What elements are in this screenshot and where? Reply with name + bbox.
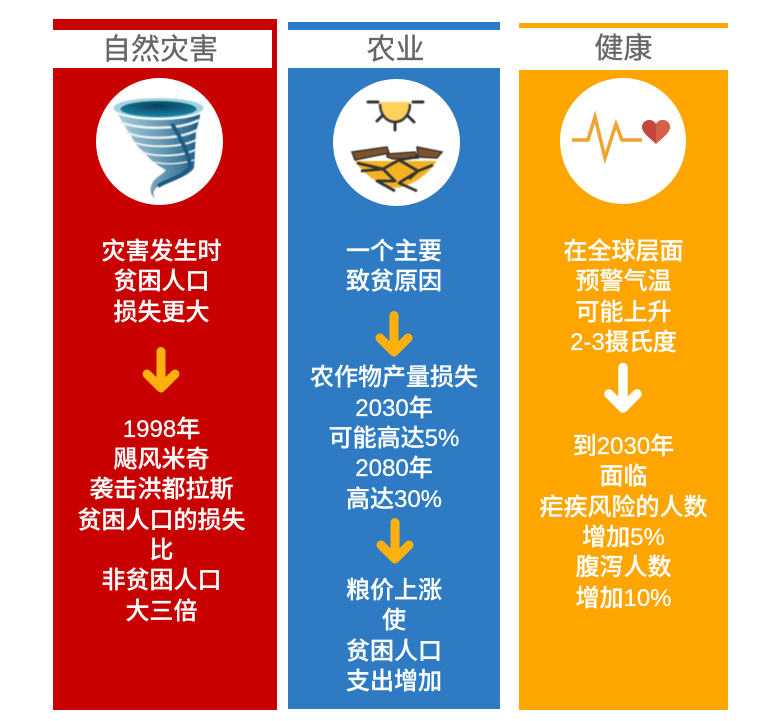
text: rising food prices: 粮价上涨 [346,577,442,604]
text: crop yield loss: 可能高达5% [329,425,459,452]
icon: tornado [96,78,222,205]
text: crop yield loss: 农作物产量损失 [310,364,478,391]
text: Hurricane Mitch: 飓风米奇 [114,446,210,473]
text: global warming: 在全球层面 [564,238,684,265]
text: Hurricane Mitch [78,416,246,625]
text: malaria and diarrhoea: 增加10% [575,585,672,612]
text: global warming [564,238,684,356]
text: main cause of poverty [346,238,442,295]
text: disaster intro: 灾害发生时 [102,238,222,265]
arrow: down [376,518,414,564]
blue column background [288,68,500,709]
text: disaster intro: 贫困人口 [114,268,210,295]
blue top bar [288,22,500,30]
icon: sun over cracked soil [333,79,460,206]
text: malaria and diarrhoea: 到2030年 [573,433,674,460]
text: rising food prices: 使 [382,607,406,634]
heading: health: 健康 [594,33,652,65]
text: Hurricane Mitch: 袭击洪都拉斯 [90,476,234,503]
heading: natural disasters: 自然灾害 [102,34,218,66]
text: Hurricane Mitch: 大三倍 [126,598,198,625]
arrow: down [376,311,412,356]
red column background [53,19,277,710]
text: crop yield loss [310,364,478,513]
text: main cause of poverty: 致贫原因 [346,268,442,295]
heading: natural disasters [53,30,272,68]
text: malaria and diarrhoea: 腹泻人数 [576,554,672,581]
text: crop yield loss: 高达30% [346,486,442,513]
text: main cause of poverty: 一个主要 [346,238,442,265]
arrow: down [142,347,180,392]
text: disaster intro [102,238,222,326]
text: malaria and diarrhoea: 疟疾风险的人数 [540,494,708,521]
text: global warming: 可能上升 [576,299,672,326]
text: rising food prices: 贫困人口 [346,638,442,665]
text: global warming: 预警气温 [576,268,672,295]
icon: heartbeat and heart [560,78,686,204]
panel: health [519,23,728,710]
panel: agriculture [288,22,500,709]
text: rising food prices: 支出增加 [346,668,442,695]
text: Hurricane Mitch: 比 [150,537,174,564]
panel: natural disasters [53,19,277,710]
text: disaster intro: 损失更大 [114,299,210,326]
orange top bar [519,23,728,28]
orange column background [519,70,728,710]
heading: agriculture: 农业 [366,34,424,66]
text: crop yield loss: 2030年 [355,395,433,422]
text: Hurricane Mitch: 贫困人口的损失 [78,507,246,534]
arrow: down [604,362,642,413]
text: malaria and diarrhoea: 增加5% [582,524,665,551]
text: malaria and diarrhoea: 面临 [600,463,648,490]
text: rising food prices [346,577,442,695]
text: Hurricane Mitch: 非贫困人口 [102,567,222,594]
text: crop yield loss: 2080年 [355,455,433,482]
text: global warming: 2-3摄氏度 [570,329,677,356]
text: malaria and diarrhoea [540,433,708,612]
text: Hurricane Mitch: 1998年 [123,416,200,443]
